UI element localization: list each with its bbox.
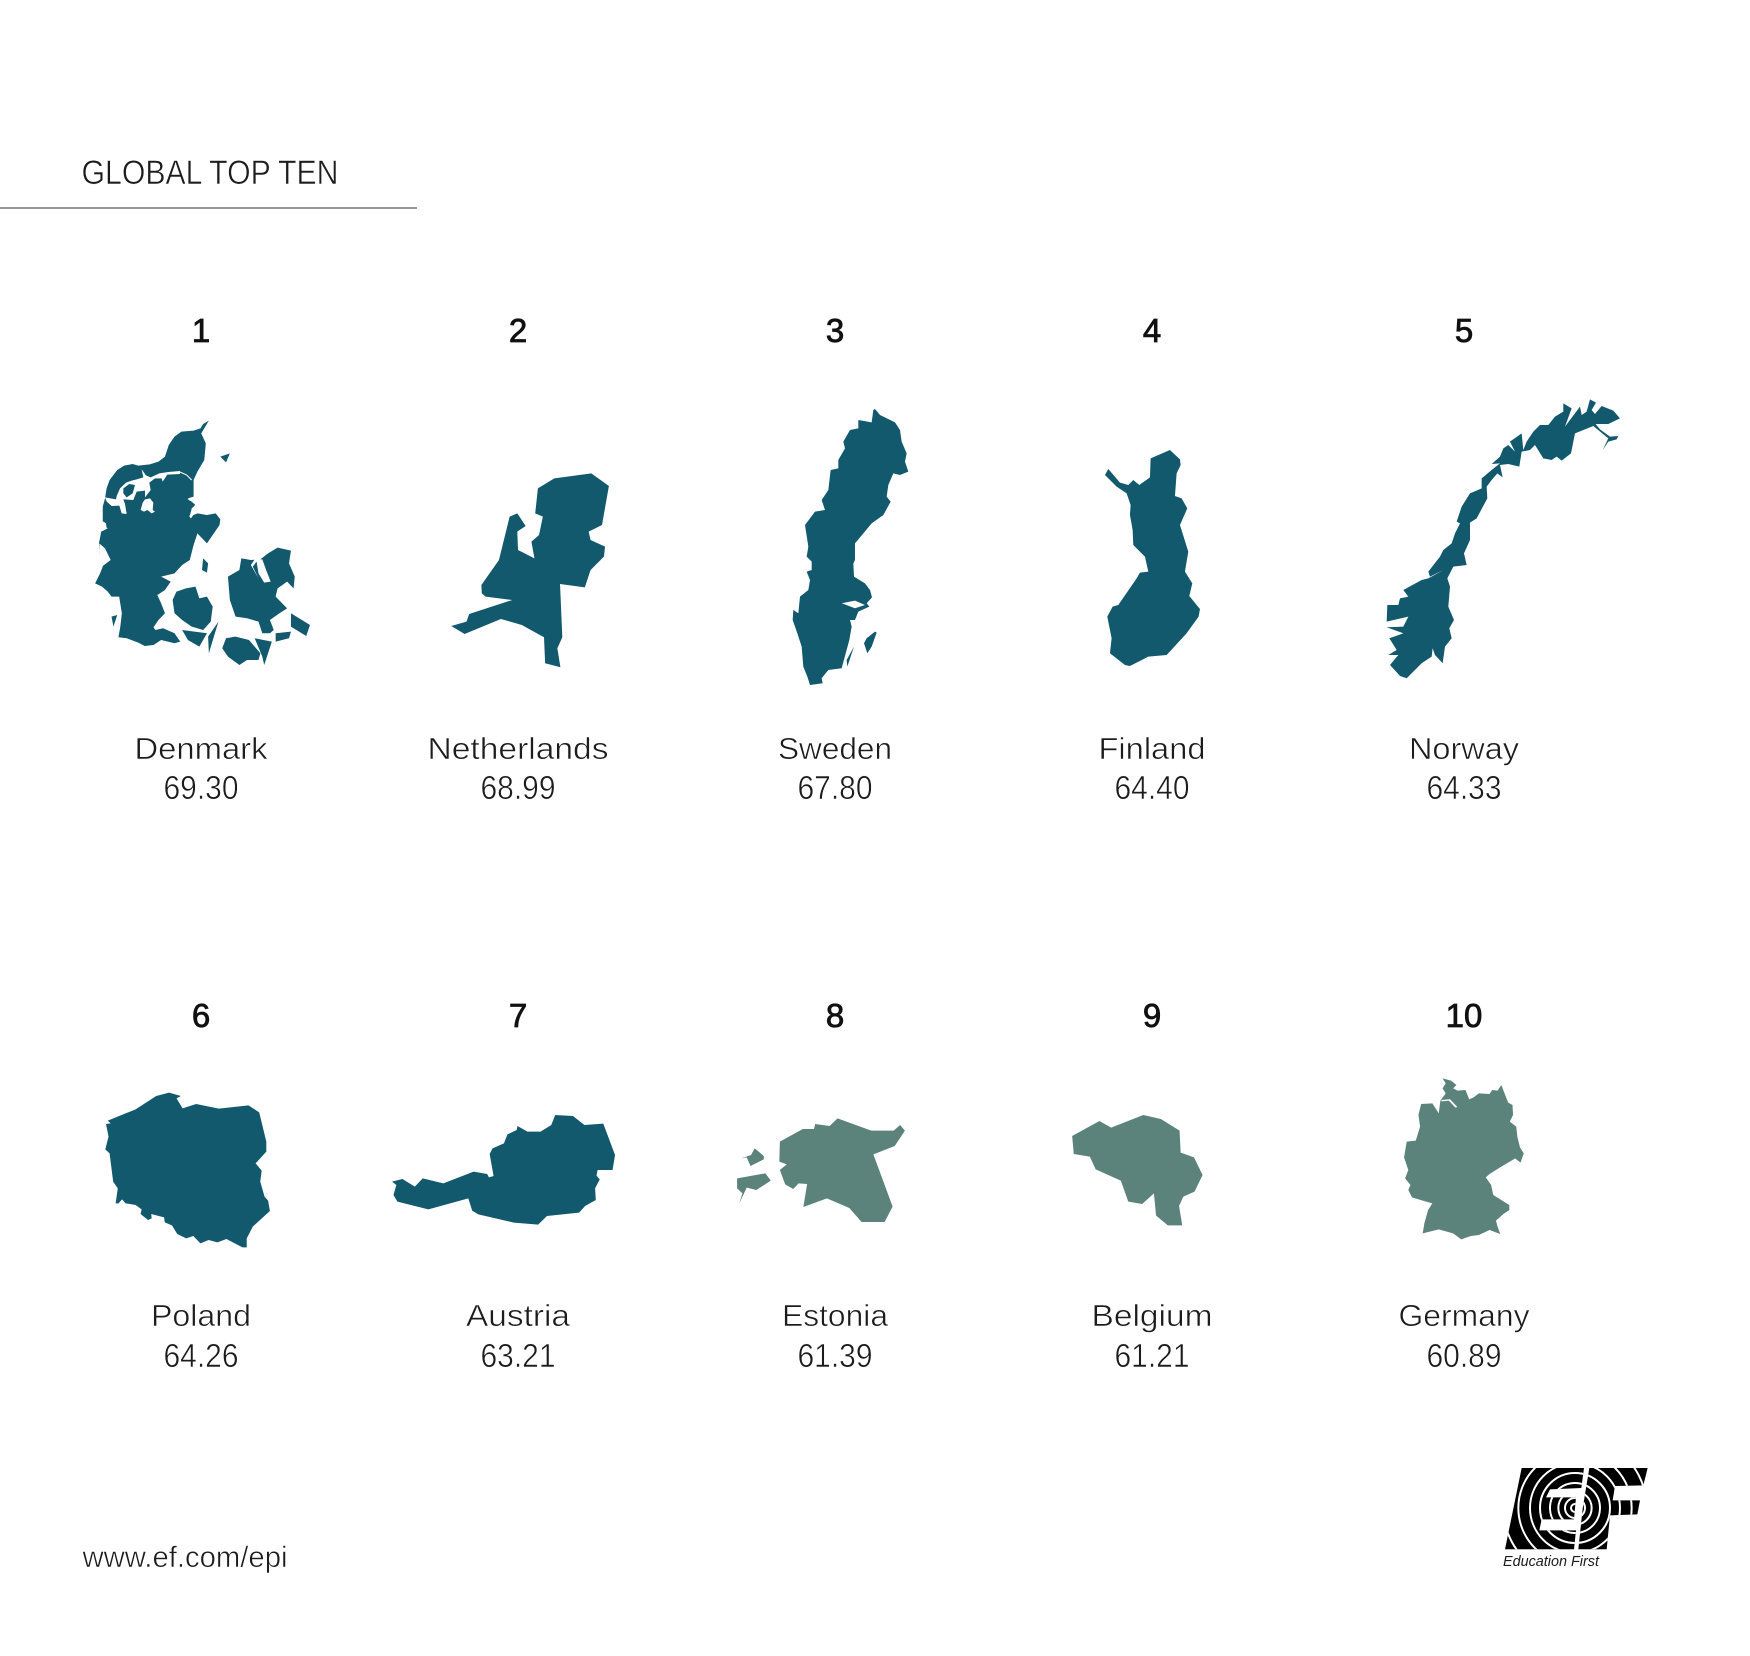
rank number: 1 [192,312,210,349]
rank number: 3 [826,312,844,349]
website url: www.ef.com/epi [82,1541,288,1574]
country name: Germany [1398,1298,1530,1333]
map: Austria [392,1115,615,1225]
country name: Norway [1409,731,1520,766]
panel: rank 5 Norway [1387,312,1620,806]
map: Sweden [793,409,908,685]
country name: Netherlands [428,731,608,766]
panel: rank 6 Poland [105,997,270,1374]
rank number: 8 [826,997,844,1034]
panel: rank 10 Germany [1398,997,1530,1374]
rank number: 9 [1143,997,1161,1034]
panel: rank 3 Sweden [778,312,908,806]
panel: rank 1 Denmark [95,312,310,806]
panel: rank 8 Estonia [737,997,905,1374]
logo mark [1505,1468,1648,1550]
score: 63.21 [480,1337,556,1374]
score: 64.26 [164,1337,238,1374]
panel: rank 4 Finland [1098,312,1206,806]
score: 61.39 [798,1337,872,1374]
country name: Denmark [134,731,268,766]
panel: rank 2 Netherlands [428,312,609,806]
country name: Belgium [1092,1298,1212,1333]
logo: EF Education First [1504,1468,1648,1566]
rank number: 7 [509,997,527,1034]
map: Estonia [737,1118,905,1222]
logo wordmark: Education First [1503,1554,1600,1570]
country name: Sweden [778,731,892,766]
title rule [0,207,417,209]
score: 60.89 [1426,1337,1502,1374]
title: GLOBAL TOP TEN [82,154,338,192]
country name: Finland [1098,731,1206,766]
score: 69.30 [164,769,238,806]
rank number: 10 [1446,997,1482,1034]
panel: rank 7 Austria [392,997,615,1374]
rank number: 5 [1455,312,1473,349]
country name: Poland [151,1298,251,1333]
score: 67.80 [798,769,872,806]
score: 68.99 [480,769,556,806]
score: 64.40 [1114,769,1190,806]
score: 61.21 [1114,1337,1190,1374]
map: Belgium [1072,1115,1203,1225]
panel: rank 9 Belgium [1072,997,1212,1374]
map: Germany [1404,1078,1524,1239]
map: Netherlands [451,473,609,667]
map: Denmark [95,421,310,665]
rank number: 6 [192,997,210,1034]
map: Norway [1387,399,1620,678]
score: 64.33 [1426,769,1502,806]
rank number: 4 [1143,312,1161,349]
rank number: 2 [509,312,527,349]
map: Finland [1105,450,1200,666]
map: Poland [105,1093,270,1247]
country name: Austria [466,1298,571,1333]
country name: Estonia [782,1298,889,1333]
